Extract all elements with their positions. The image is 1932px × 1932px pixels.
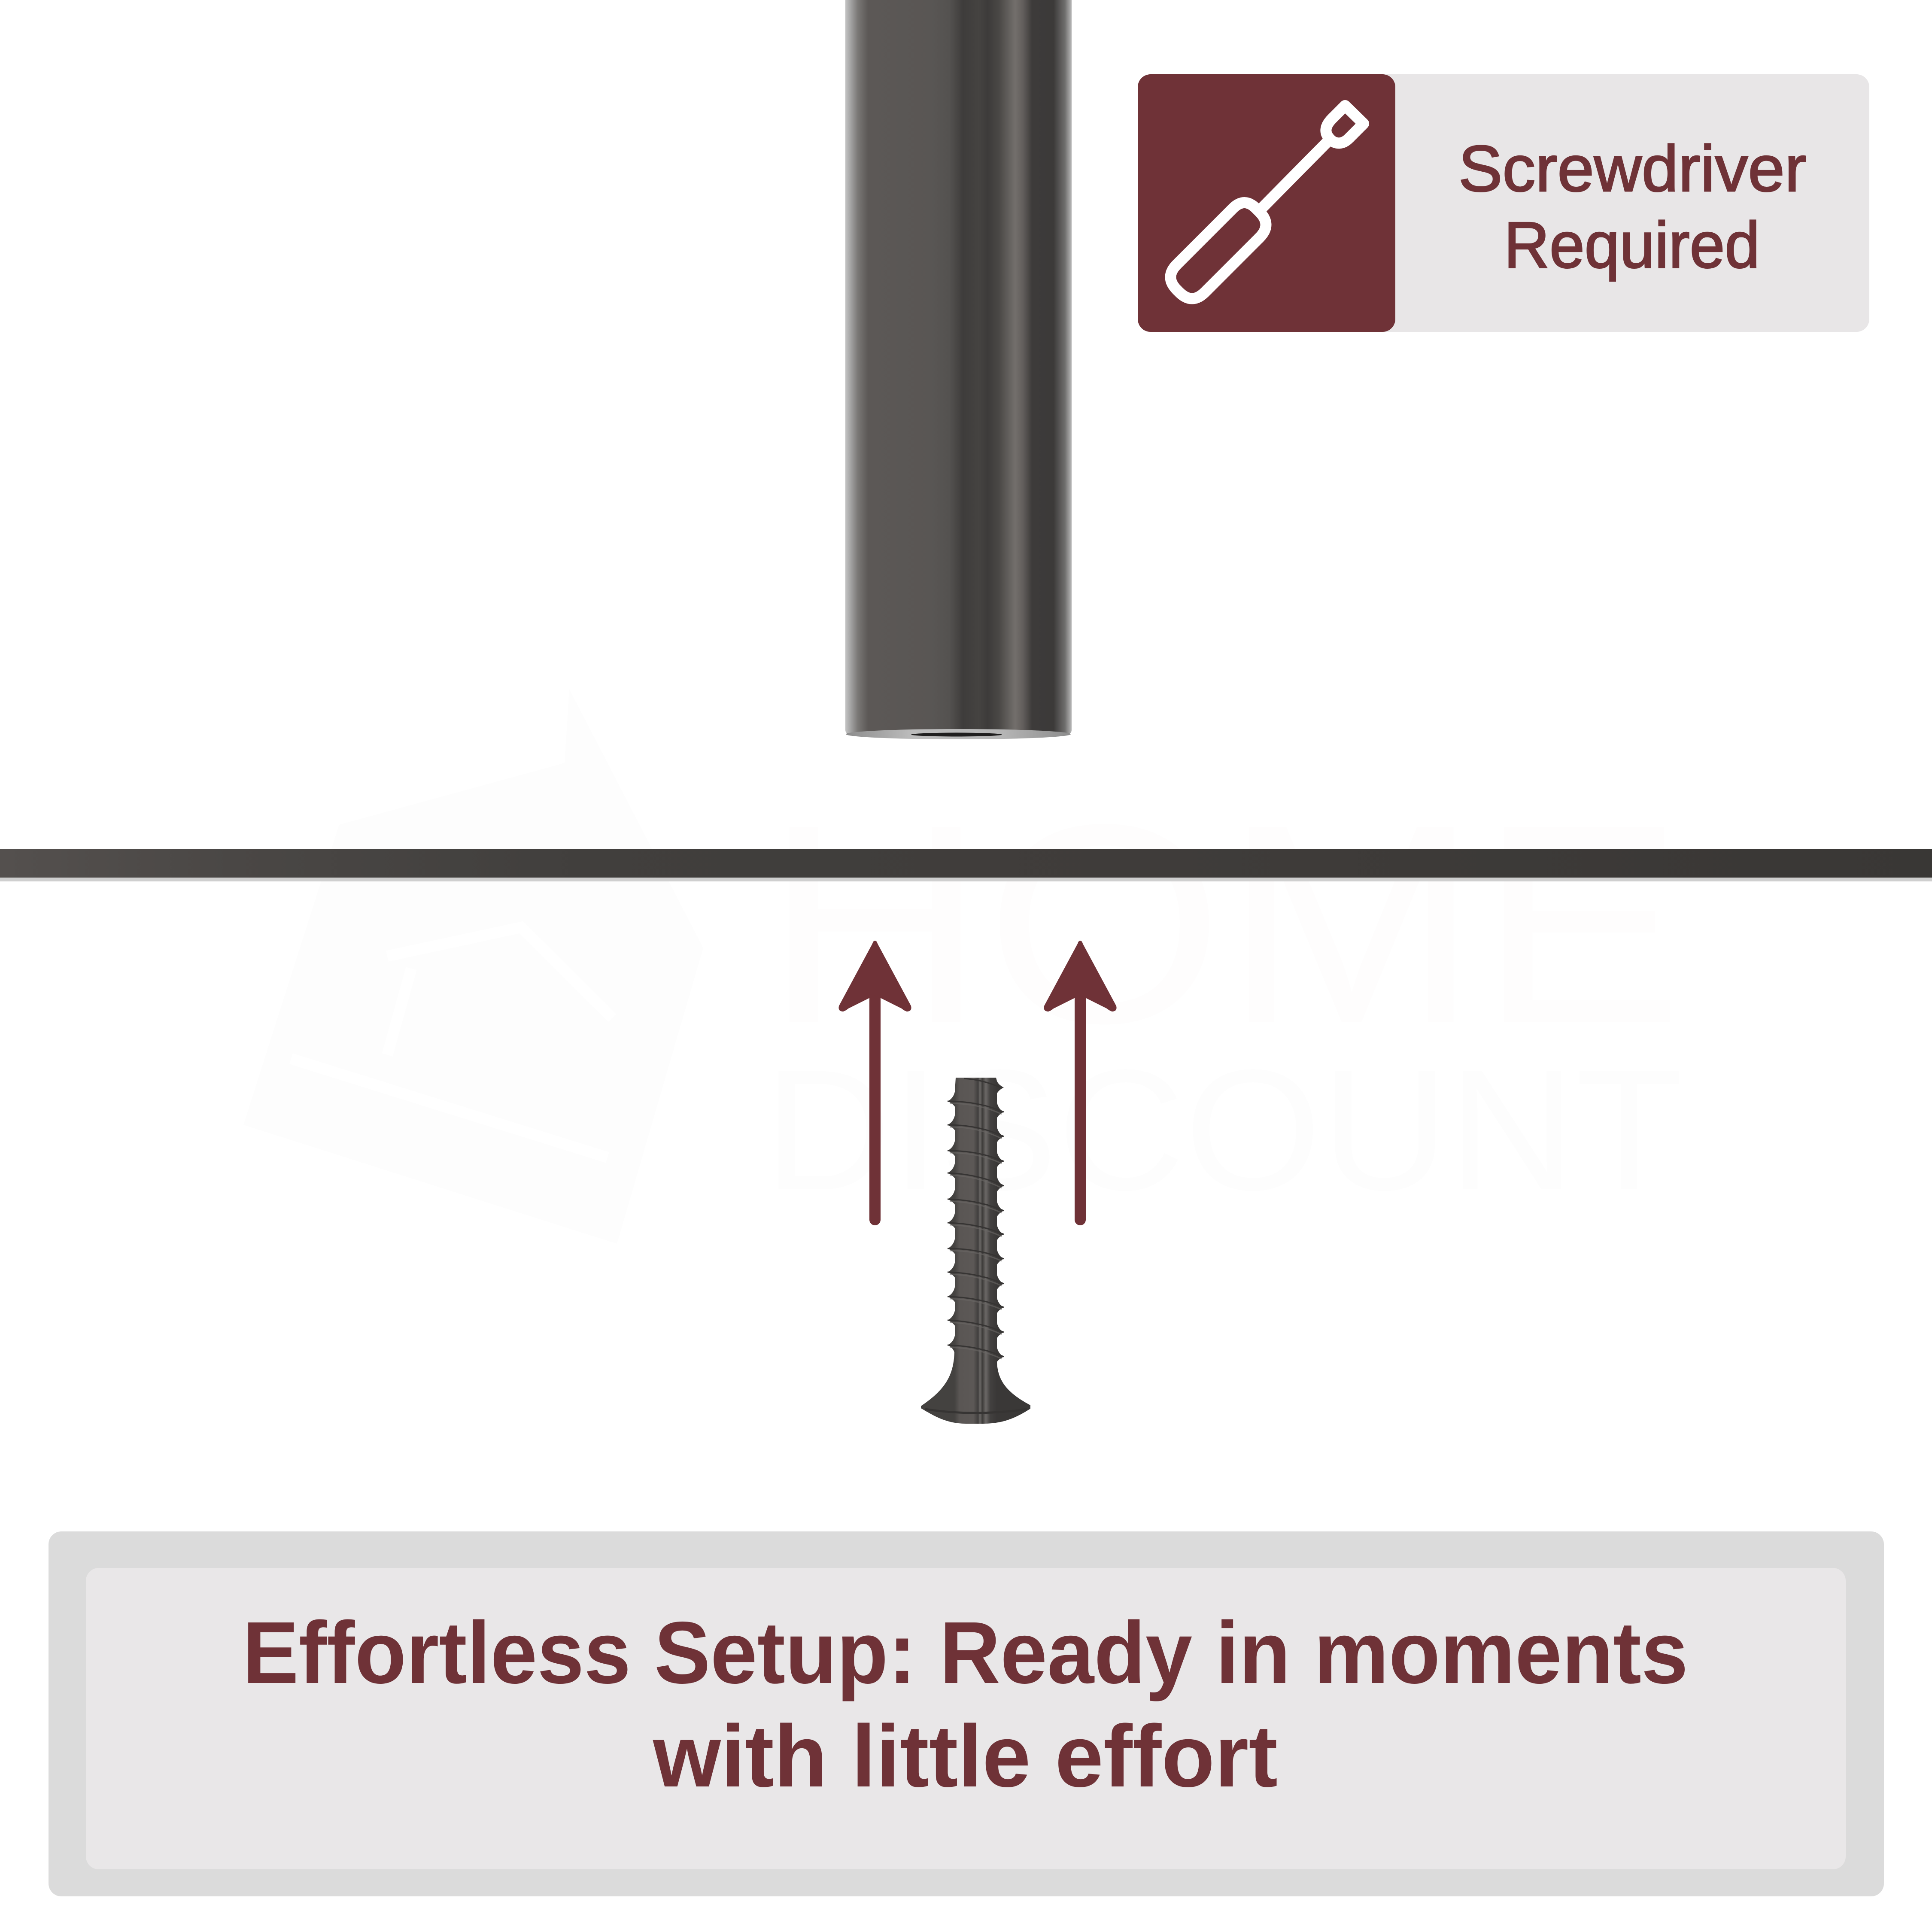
caption panel (49, 1531, 1884, 1896)
watermark: faint brand text: HOME (764, 766, 1683, 1082)
arrow: right upward (1044, 941, 1117, 1225)
badge text: Screwdriver (1458, 132, 1807, 205)
icon: screwdriver (1170, 106, 1364, 299)
mounting surface bar (0, 849, 1932, 881)
caption inner panel (86, 1568, 1846, 1869)
badge label panel (1352, 74, 1869, 332)
screw (921, 1078, 1030, 1424)
badge: screwdriver required (1138, 74, 1869, 332)
arrow: left upward (838, 941, 911, 1225)
watermark: faint brand text (764, 766, 1683, 1226)
caption outer frame (49, 1531, 1884, 1896)
badge text: Required (1504, 209, 1760, 282)
metal tube standoff (845, 0, 1072, 739)
badge icon tile (1138, 74, 1395, 332)
caption text: with little effort (653, 1707, 1278, 1805)
watermark: faint brand text: DISCOUNT (764, 1034, 1683, 1226)
caption text: Effortless Setup: Ready in moments (243, 1604, 1688, 1702)
watermark: faint house logo (243, 689, 703, 1244)
